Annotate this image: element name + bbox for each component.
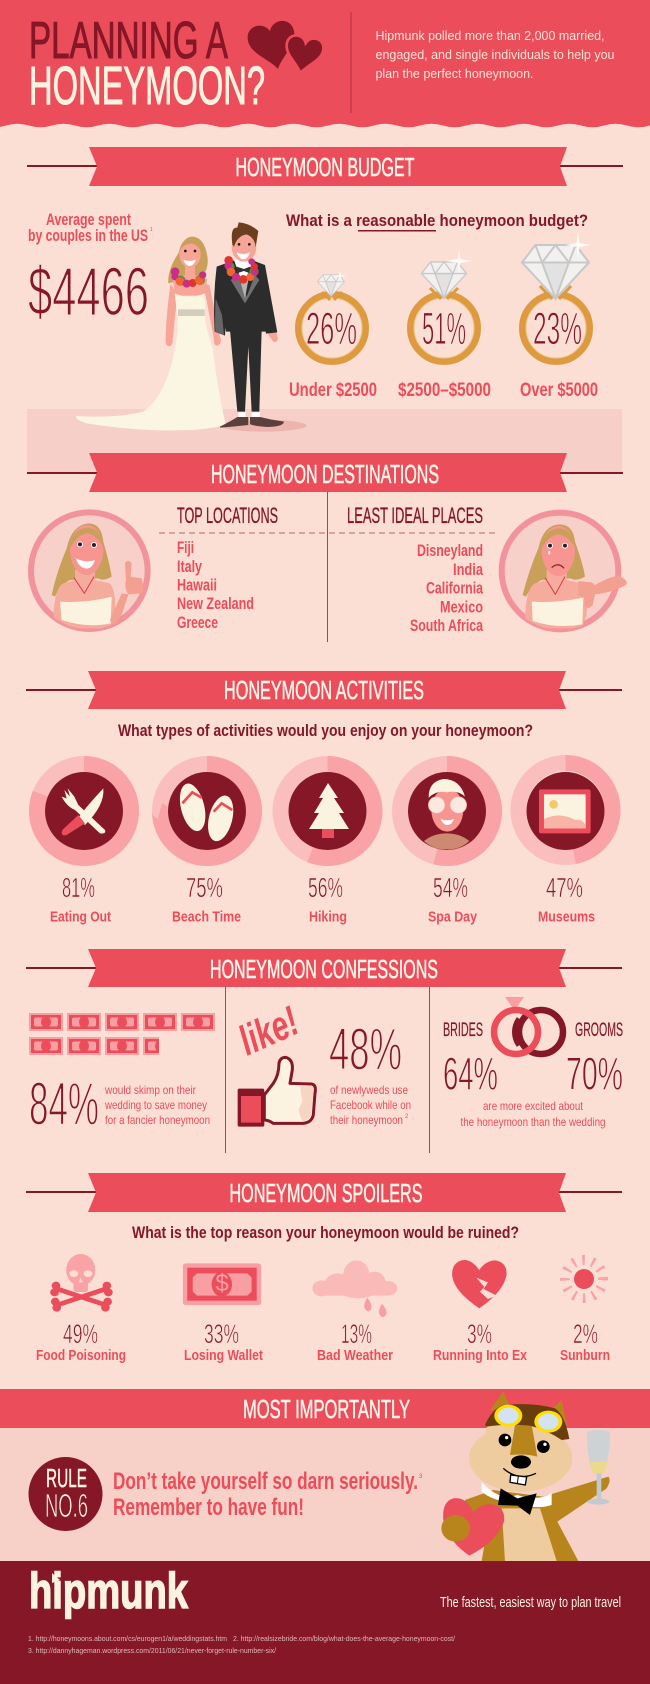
heading: honeymoon destinations: HONEYMOON DESTINATIONS: [211, 459, 439, 489]
activity: eating out: Eating Out: [50, 908, 111, 926]
icon: two hearts: [245, 19, 325, 76]
spoiler: food poisoning: [36, 1254, 126, 1364]
title: PLANNING A: [29, 12, 228, 70]
heading: most importantly: [0, 1389, 650, 1428]
spoiler: bad weather: Bad Weather: [317, 1347, 393, 1364]
dashed rule: [159, 532, 497, 534]
stat: 48 percent: [329, 1016, 411, 1127]
spoiler: food poisoning: 49%: [63, 1319, 98, 1349]
badge: rule no 6: RULE: [46, 1463, 87, 1493]
list: top locations: Hawaii: [177, 576, 217, 594]
activity: beach time: Beach Time: [172, 908, 241, 926]
panel: least ideal places: LEAST IDEAL PLACES: [347, 503, 483, 528]
heading: honeymoon spoilers: [26, 1173, 622, 1212]
groom: [214, 222, 284, 428]
list: least ideal places: Mexico: [440, 598, 483, 616]
badge: rule no 6: [28, 1457, 102, 1531]
list: least ideal places: California: [426, 579, 483, 598]
spoiler: food poisoning: Food Poisoning: [36, 1347, 126, 1364]
stat: 84 percent: would skimp on their: [104, 1083, 196, 1097]
spoiler: bad weather: 13%: [341, 1319, 372, 1349]
intro text: plan the perfect honeymoon.: [376, 66, 534, 81]
spoiler: running into ex: 3%: [467, 1319, 492, 1349]
spoiler: losing wallet: $: [215, 1270, 229, 1297]
spoiler: running into ex: [433, 1260, 528, 1364]
stat: brides and grooms: BRIDES: [443, 1020, 483, 1041]
stat: 48 percent: Facebook while on: [330, 1098, 411, 1112]
activity: museums: [518, 763, 612, 926]
stat: 84 percent: wedding to save money: [104, 1098, 207, 1112]
list: least ideal places: Disneyland: [417, 541, 483, 560]
ring: 2500 to 5000: 51%: [422, 303, 466, 354]
heading: honeymoon destinations: [27, 453, 623, 492]
budget question: What is a reasonable honeymoon budget?: [286, 211, 588, 230]
spoiler: losing wallet: Losing Wallet: [184, 1347, 263, 1364]
bride: [76, 237, 226, 430]
references: 1. http://honeymoons.about.com/cs/eurogen1/a/weddingstats.htm: [28, 1634, 227, 1643]
average spent label: by couples in the US: [28, 226, 148, 245]
intro text: engaged, and single individuals to help you: [376, 47, 614, 62]
spoilers question: What is the top reason your honeymoon would be ruined?: [132, 1223, 519, 1242]
list: least ideal places: [410, 541, 483, 635]
illustration: bride and groom: [76, 222, 307, 432]
activities question: What types of activities would you enjoy on your honeymoon?: [118, 721, 533, 740]
header band: [0, 0, 650, 127]
ring: over 5000: [520, 232, 598, 401]
panel: top locations: [177, 503, 278, 632]
heading: honeymoon budget: HONEYMOON BUDGET: [236, 152, 415, 182]
heading: most importantly: MOST IMPORTANTLY: [243, 1394, 410, 1424]
stat: brides and grooms: are more excited about: [483, 1099, 584, 1113]
spoiler: sunburn: [560, 1259, 610, 1364]
ring: over 5000: 23%: [533, 303, 582, 354]
activity: hiking: Hiking: [309, 908, 347, 926]
heading: honeymoon activities: [26, 671, 622, 709]
logo: hipmunk: hipmunk: [29, 1563, 188, 1619]
activity: museums: Museums: [538, 908, 595, 926]
activity: hiking: [280, 764, 374, 926]
average spent value: $4466: [28, 253, 149, 330]
panel: top locations: TOP LOCATIONS: [177, 503, 278, 528]
panel: least ideal places: [347, 503, 483, 635]
mascot: chipmunk: [441, 1392, 610, 1561]
stat: 84 percent: 84%: [29, 1070, 99, 1138]
icon: happy bride thumbs up: [31, 512, 148, 629]
icon: sad bride thumbs down: [502, 513, 627, 629]
stat: brides and grooms: the honeymoon than the wedding: [460, 1115, 606, 1129]
activity: hiking: 56%: [308, 872, 343, 903]
badge: rule no 6: NO.6: [45, 1487, 88, 1524]
heading: honeymoon spoilers: HONEYMOON SPOILERS: [230, 1178, 422, 1208]
stat: 84 percent: [29, 1070, 210, 1138]
average spent label: [28, 210, 153, 245]
rule text: [113, 1468, 423, 1521]
list: top locations: [177, 538, 254, 632]
stat: 48 percent: 2: [405, 1114, 409, 1120]
ring: under 2500: [289, 271, 377, 401]
heading: honeymoon activities: HONEYMOON ACTIVITIES: [224, 675, 424, 705]
list: top locations: Fiji: [177, 538, 194, 557]
spoiler: running into ex: Running Into Ex: [433, 1347, 528, 1364]
panel: most importantly band: [0, 1428, 650, 1561]
activity: eating out: 81%: [62, 872, 95, 903]
heading: honeymoon confessions: HONEYMOON CONFESSIONS: [210, 954, 438, 984]
stat: brides and grooms: [443, 1020, 623, 1129]
references: 3. http://dannyhageman.wordpress.com/2011/06/21/never-forget-rule-number-six/: [28, 1646, 277, 1655]
stat: 48 percent: 48%: [329, 1016, 402, 1082]
divider: destinations: [327, 492, 328, 642]
rule text: 3: [419, 1474, 423, 1480]
heading: honeymoon budget: [27, 147, 623, 186]
title: [29, 12, 265, 116]
like lettering: like!: [232, 997, 305, 1064]
stat: 84 percent: for a fancier honeymoon: [105, 1113, 210, 1127]
title: HONEYMOON?: [29, 56, 265, 116]
spoiler: losing wallet: 33%: [204, 1319, 239, 1349]
activity: beach time: [160, 764, 254, 926]
list: top locations: Italy: [177, 557, 202, 576]
activity: museums: 47%: [546, 872, 583, 903]
rule text: Don’t take yourself so darn seriously.: [113, 1468, 418, 1495]
activity: beach time: 75%: [186, 872, 223, 903]
ring: 2500 to 5000: [398, 250, 491, 401]
rule text: Remember to have fun!: [113, 1494, 304, 1521]
ring: under 2500: Under $2500: [289, 380, 377, 401]
stat: brides and grooms: 64%: [443, 1048, 498, 1100]
spoiler: sunburn: 2%: [573, 1319, 598, 1349]
spoiler: bad weather: [312, 1260, 397, 1364]
average spent label: 1: [150, 227, 153, 233]
references: [28, 1634, 456, 1655]
list: top locations: New Zealand: [177, 594, 254, 613]
stat: 48 percent: their honeymoon: [330, 1113, 403, 1127]
dividers: confessions: [226, 987, 430, 1153]
heading: honeymoon confessions: [26, 949, 622, 987]
ring: 2500 to 5000: $2500–$5000: [398, 380, 491, 401]
list: least ideal places: South Africa: [410, 616, 483, 635]
activity: spa day: [400, 764, 494, 926]
references: 2. http://realsizebride.com/blog/what-does-the-average-honeymoon-cost/: [233, 1634, 456, 1643]
list: least ideal places: India: [453, 560, 483, 579]
average spent label: Average spent: [46, 210, 131, 229]
spoiler: losing wallet: [183, 1263, 263, 1364]
intro text: Hipmunk polled more than 2,000 married,: [376, 28, 604, 43]
list: top locations: Greece: [177, 613, 218, 632]
activity: eating out: [37, 764, 131, 926]
footer band: [0, 1561, 650, 1684]
stat: 48 percent: of newlyweds use: [330, 1083, 408, 1097]
floor panel: [27, 409, 622, 472]
intro text: [376, 28, 614, 81]
ring: under 2500: 26%: [306, 303, 357, 354]
activity: spa day: 54%: [433, 872, 468, 903]
icon: interlocked rings: [494, 997, 563, 1054]
spoiler: sunburn: Sunburn: [560, 1347, 610, 1364]
icon: thumbs up: [238, 1057, 315, 1127]
icon row: money bills: [29, 1013, 215, 1055]
ring: over 5000: Over $5000: [520, 380, 598, 401]
activity: spa day: Spa Day: [428, 908, 478, 926]
